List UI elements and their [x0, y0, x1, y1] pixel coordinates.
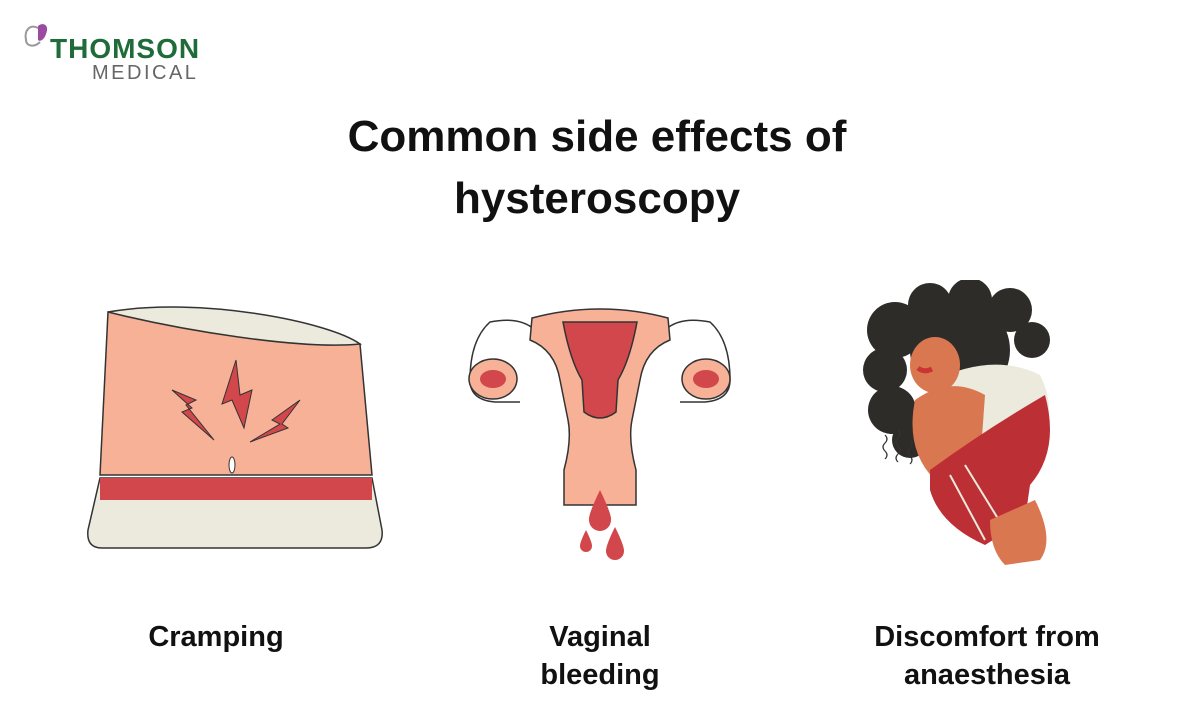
logo — [24, 24, 200, 84]
icon: abdomen cramping — [87, 306, 383, 549]
label: discomfort: anaesthesia — [904, 659, 1070, 691]
icon: uterus — [468, 308, 731, 560]
label: vaginal bleeding: Vaginal — [549, 621, 651, 653]
label: vaginal bleeding — [540, 621, 660, 691]
icon: woman in discomfort — [863, 280, 1050, 565]
title — [348, 112, 846, 223]
title: hysteroscopy — [454, 174, 740, 223]
label: discomfort — [874, 621, 1100, 691]
logo: THOMSON — [50, 33, 200, 64]
logo: MEDICAL — [92, 62, 198, 84]
label: vaginal bleeding: bleeding — [540, 659, 660, 691]
label: discomfort: Discomfort from — [874, 621, 1100, 653]
label: cramping: Cramping — [148, 621, 284, 653]
title: Common side effects of — [348, 112, 846, 161]
